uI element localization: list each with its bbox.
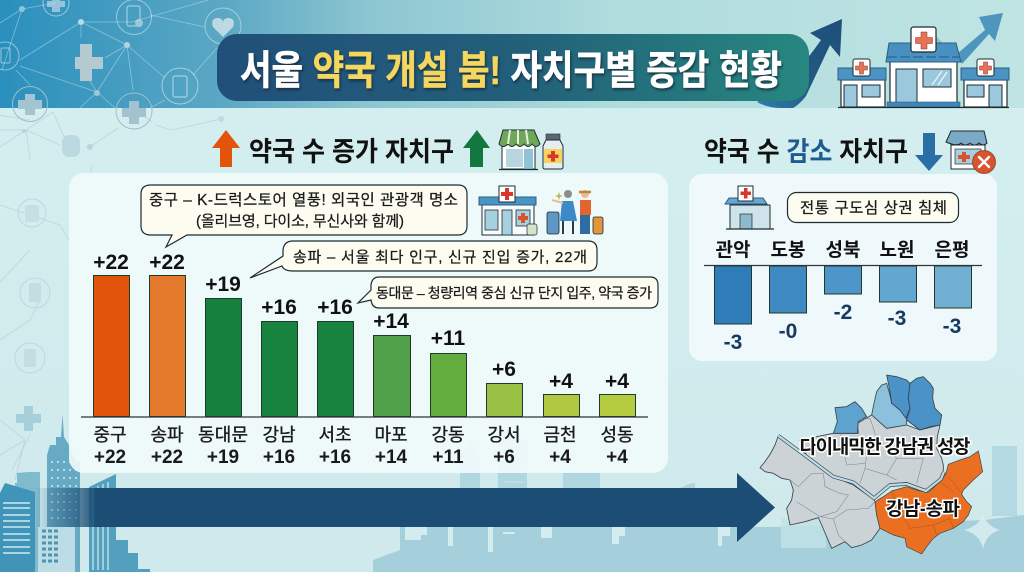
center store bbox=[886, 27, 961, 107]
district names and values: 동대문 bbox=[198, 425, 248, 445]
callout: old downtown bbox=[788, 192, 958, 222]
map: gray districts bbox=[760, 415, 943, 548]
left store bbox=[838, 59, 886, 107]
district names and values: 중구 bbox=[93, 425, 127, 445]
district names and values: +16 bbox=[319, 447, 351, 468]
district names and values: +6 bbox=[493, 447, 515, 468]
heading text: decrease: 약국 수 감소 자치구 bbox=[704, 137, 908, 167]
icon: tourists bbox=[547, 190, 603, 234]
bar values: -3 bbox=[888, 307, 906, 330]
heading: decrease bbox=[704, 131, 996, 174]
bar values bbox=[724, 301, 961, 354]
bar values: +6 bbox=[492, 358, 516, 381]
sparkle bbox=[964, 513, 1000, 549]
panel: increase chart bbox=[69, 173, 668, 473]
bar values: -3 bbox=[724, 331, 742, 354]
district names and values: 금천 bbox=[543, 425, 577, 445]
icon: green up arrow bbox=[463, 130, 490, 167]
network pattern with medical icons bbox=[0, 0, 243, 480]
icon: pharmacy bbox=[479, 186, 537, 235]
bar values: +22 bbox=[93, 251, 129, 274]
icon: blue down arrow bbox=[915, 133, 943, 171]
district names: 성북 bbox=[826, 239, 860, 261]
callout: Songpa: 송파 – 서울 최다 인구, 신규 진입 증가, 22개 bbox=[293, 249, 587, 266]
city skyline bbox=[0, 414, 1024, 572]
pharmacy illustration bbox=[838, 13, 1009, 108]
bar values: +16 bbox=[261, 296, 297, 319]
district names bbox=[716, 239, 969, 261]
district names and values: +11 bbox=[432, 447, 464, 468]
bar chart: decreases bbox=[704, 266, 982, 324]
district names and values: 서초 bbox=[318, 425, 352, 445]
district names and values bbox=[93, 425, 634, 468]
district names and values: +19 bbox=[207, 447, 239, 468]
bar values: -3 bbox=[943, 315, 961, 338]
heading: increase bbox=[212, 130, 563, 170]
district names and values: 송파 bbox=[150, 425, 184, 445]
bar values: -2 bbox=[834, 301, 852, 324]
bar values: +19 bbox=[205, 273, 241, 296]
bar values: +4 bbox=[605, 370, 629, 393]
district names and values: 성동 bbox=[600, 425, 634, 445]
district names and values: +4 bbox=[549, 447, 571, 468]
callout: Jung-gu: (올리브영, 다이소, 무신사와 함께) bbox=[196, 213, 404, 230]
district names and values: 강서 bbox=[487, 425, 521, 445]
bar values: +11 bbox=[431, 327, 466, 350]
bar values: +14 bbox=[373, 310, 409, 333]
bar values: +4 bbox=[549, 370, 573, 393]
icon: small pharmacy bbox=[725, 186, 774, 229]
map label: growth: 다이내믹한 강남권 성장 bbox=[800, 436, 970, 458]
bar values: +16 bbox=[317, 296, 353, 319]
flow arrow bbox=[35, 473, 775, 542]
bar values bbox=[93, 251, 629, 393]
district names and values: +22 bbox=[151, 447, 183, 468]
bar values: +22 bbox=[149, 251, 185, 274]
callout: old downtown: 전통 구도심 상권 침체 bbox=[800, 199, 947, 217]
right store bbox=[961, 59, 1009, 107]
map label: Gangnam-Songpa: 강남-송파 bbox=[886, 498, 961, 520]
bar chart: increases bbox=[81, 276, 648, 417]
district names and values: +16 bbox=[263, 447, 295, 468]
map: decline districts bbox=[833, 375, 942, 433]
map: river bbox=[778, 436, 944, 498]
district names and values: +14 bbox=[375, 447, 408, 468]
district names and values: 마포 bbox=[374, 425, 408, 445]
heading text: increase: 약국 수 증가 자치구 bbox=[249, 137, 454, 167]
icon: orange up arrow bbox=[212, 130, 240, 167]
banner pill bbox=[217, 34, 809, 101]
map: growth districts bbox=[875, 451, 983, 554]
trend arrow behind banner bbox=[757, 19, 842, 108]
title banner bbox=[217, 19, 842, 108]
callout: Jung-gu bbox=[141, 185, 467, 247]
district names: 노원 bbox=[880, 239, 914, 261]
icon: closed store bbox=[946, 131, 996, 174]
bar values: -0 bbox=[779, 320, 797, 343]
district names and values: 강동 bbox=[431, 425, 465, 445]
district names: 관악 bbox=[716, 239, 750, 261]
callout: Songpa bbox=[250, 241, 597, 278]
callout: Dongdaemun bbox=[358, 277, 658, 308]
district names: 도봉 bbox=[771, 239, 805, 261]
Seoul map bbox=[760, 375, 1000, 554]
panel: decrease chart bbox=[689, 174, 997, 361]
callout: Jung-gu: 중구 – K-드럭스토어 열풍! 외국인 관광객 명소 bbox=[149, 191, 458, 209]
district names and values: +22 bbox=[94, 447, 126, 468]
district names and values: +4 bbox=[606, 447, 628, 468]
banner title: 서울 약국 개설 붐! 자치구별 증감 현황 bbox=[240, 49, 782, 93]
callout: Dongdaemun: 동대문 – 청량리역 중심 신규 단지 입주, 약국 증가 bbox=[376, 285, 652, 301]
icon: medicine bottle bbox=[543, 134, 563, 169]
district names: 은평 bbox=[935, 239, 969, 261]
icon: green store bbox=[499, 130, 540, 170]
district names and values: 강남 bbox=[262, 425, 296, 445]
